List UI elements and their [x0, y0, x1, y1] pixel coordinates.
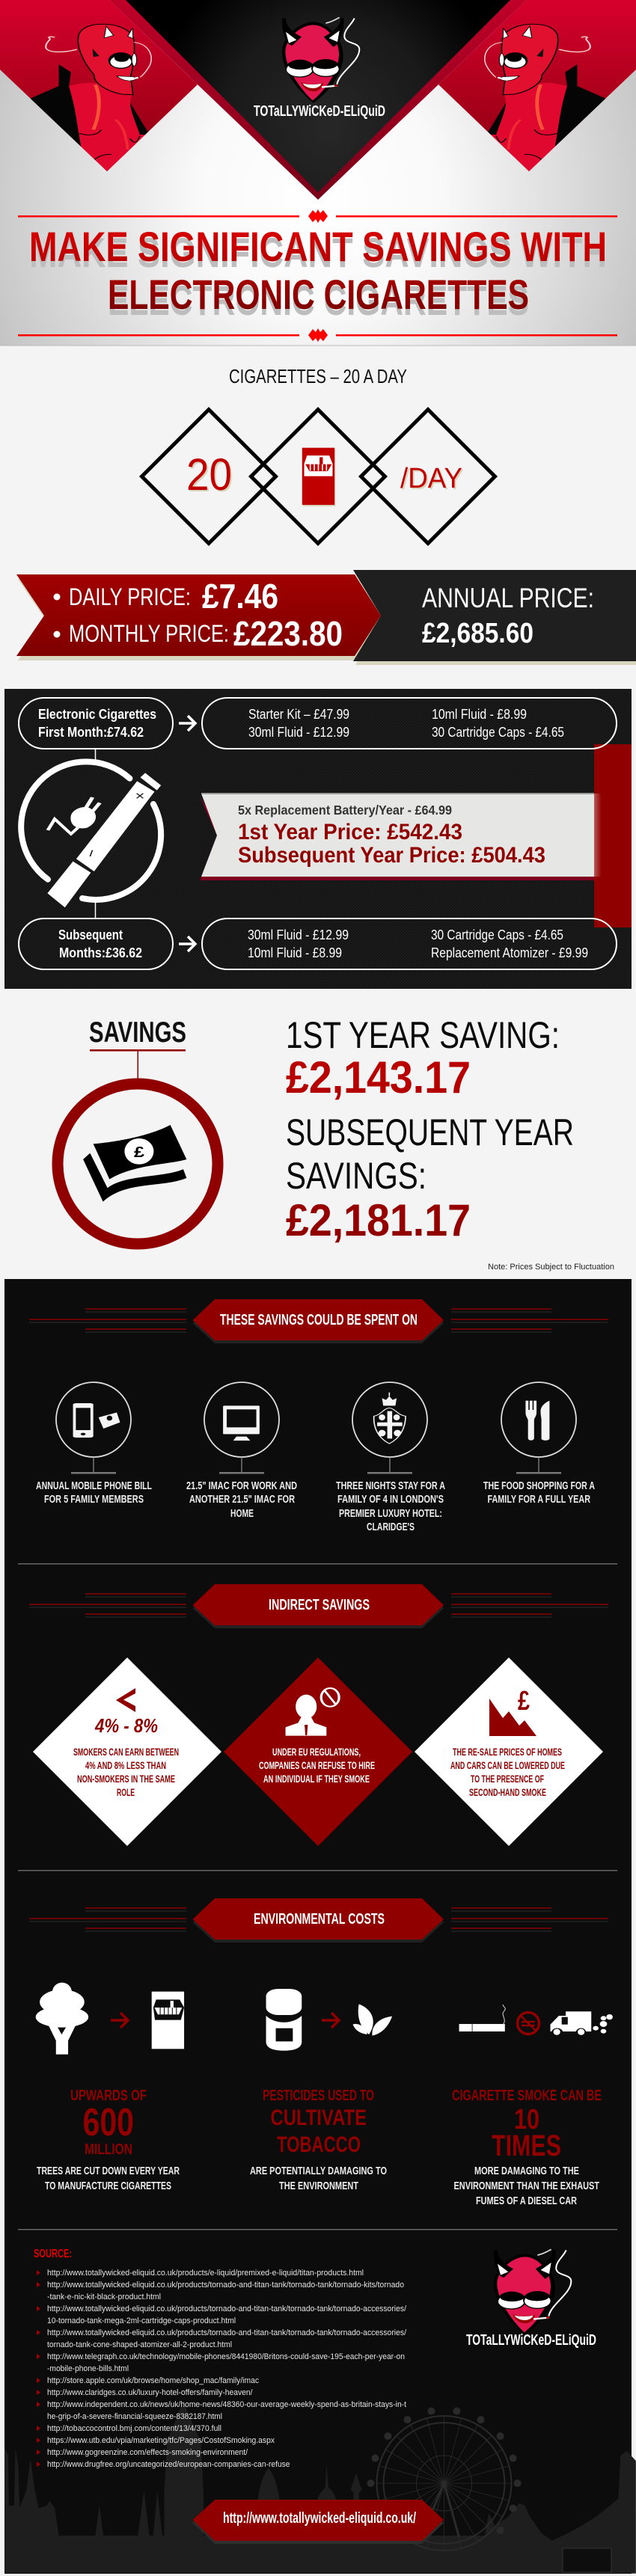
sources list: http://store.apple.com/uk/browse/home/shop_mac/family/imac	[47, 2376, 259, 2385]
Big Wheel	[367, 2407, 521, 2551]
diamond: EU regulations: UNDER EU REGULATIONS,	[272, 1747, 361, 1758]
icon: falling price chart: £	[518, 1685, 530, 1716]
column: pesticides: ARE POTENTIALLY DAMAGING TO	[250, 2165, 387, 2177]
icon: e-cigarette in ring	[21, 761, 161, 907]
ribbon: yearly prices: 5x Replacement Battery/Year - £64.99	[238, 803, 452, 818]
item: iMac	[186, 1382, 297, 1520]
title	[29, 223, 607, 318]
diamond: lower earnings: ROLE	[117, 1787, 135, 1798]
item: Claridge's hotel	[336, 1382, 445, 1533]
pill: first month: Electronic Cigarettes	[38, 707, 156, 722]
item: mobile phone bill: FOR 5 FAMILY MEMBERS	[44, 1494, 144, 1506]
price ribbon: daily and monthly: MONTHLY PRICE:	[69, 620, 229, 647]
column: pesticides: PESTICIDES USED TO	[263, 2088, 374, 2104]
logo: devil head	[282, 17, 359, 103]
pill: first month items: 30 Cartridge Caps - £4.65	[432, 725, 564, 740]
sources list: http://www.totallywicked-eliquid.co.uk/products/tornado-and-titan-tank/tornado-tank/tornado-kits/tornado	[47, 2281, 404, 2290]
ribbon: yearly prices	[200, 793, 594, 880]
icon: cigarette pack	[302, 448, 334, 505]
footer banner: website URL	[193, 2500, 444, 2544]
item: iMac: 21.5" IMAC FOR WORK AND	[186, 1480, 297, 1492]
header banner	[0, 0, 636, 346]
section banner: these savings could be spent on	[29, 1299, 608, 1343]
column: pesticides: THE ENVIRONMENT	[279, 2180, 358, 2192]
panel: electronic cigarette costs	[4, 689, 632, 989]
price ribbon: annual: £2,685.60	[422, 618, 533, 649]
diamond: EU regulations	[224, 1657, 412, 1846]
diamond: lower earnings: 4% - 8%	[94, 1714, 158, 1737]
bottom rule with ornament	[18, 328, 617, 342]
savings section: £2,181.17	[286, 1195, 471, 1245]
bridge base	[563, 2548, 611, 2572]
column: trees: TO MANUFACTURE CIGARETTES	[45, 2180, 171, 2192]
sources list: SOURCE:	[34, 2248, 72, 2260]
diamond: resale prices: THE RE-SALE PRICES OF HOMES	[453, 1747, 562, 1758]
savings section: SAVINGS:	[286, 1155, 426, 1197]
section banner: these savings could be spent on: THESE SAVINGS COULD BE SPENT ON	[220, 1312, 418, 1328]
diamond: lower earnings: 4% AND 8% LESS THAN	[85, 1760, 166, 1771]
column: trees: 600	[82, 2101, 134, 2144]
subtitle: cigarettes: CIGARETTES – 20 A DAY	[229, 365, 407, 387]
diamond: resale prices: SECOND-HAND SMOKE	[469, 1787, 546, 1798]
sources list: tornado-tank-cone-shaped-atomizer-all-2-product.html	[47, 2340, 232, 2349]
arrow	[179, 716, 195, 731]
section banner: indirect savings	[29, 1584, 608, 1628]
price ribbon: daily and monthly: £7.46	[202, 577, 278, 616]
panel: dark lower section	[4, 1279, 632, 2574]
pill: subsequent items: 30 Cartridge Caps - £4.65	[431, 927, 563, 942]
price ribbon: daily and monthly	[16, 574, 382, 660]
pill: first month: First Month:£74.62	[38, 725, 144, 740]
heading: savings: SAVINGS	[89, 1016, 186, 1049]
item: food shopping	[483, 1382, 595, 1506]
sources list: https://www.utb.edu/vpia/marketing/tfc/Pages/CostofSmoking.aspx	[47, 2436, 275, 2445]
pill: subsequent months: Months:£36.62	[59, 945, 142, 960]
savings section: £2,143.17	[286, 1052, 471, 1103]
pill: first month items	[202, 698, 617, 749]
item: Claridge's hotel: THREE NIGHTS STAY FOR A	[336, 1480, 445, 1492]
sources list: he-grip-of-a-severe-financial-squeeze-8382187.html	[47, 2412, 222, 2421]
diamond: lower earnings: SMOKERS CAN EARN BETWEEN	[73, 1747, 179, 1758]
icon: tree to cigarette pack	[36, 1983, 184, 2055]
red side block	[594, 744, 632, 927]
sources list: http://www.drugfree.org/uncategorized/european-companies-can-refuse	[47, 2460, 290, 2469]
sources list: http://tobaccocontrol.bmj.com/content/13/4/370.full	[47, 2424, 221, 2433]
pill: first month items: Starter Kit – £47.99	[248, 707, 349, 722]
diamonds: 20 packs per day	[142, 410, 495, 543]
note: Note: Prices Subject to Fluctuation	[488, 1263, 614, 1272]
item: mobile phone bill	[36, 1382, 152, 1506]
first year saving: 1ST YEAR SAVING:	[286, 1014, 560, 1056]
number 20: 20	[186, 450, 232, 500]
footer logo	[466, 2249, 596, 2349]
column: cigarette smoke: FUMES OF A DIESEL CAR	[476, 2195, 577, 2207]
column: pesticides: TOBACCO	[277, 2132, 361, 2157]
column: cigarette smoke: TIMES	[492, 2129, 561, 2162]
diamond: lower earnings: NON-SMOKERS IN THE SAME	[77, 1773, 175, 1785]
sources list: http://www.totallywicked-eliquid.co.uk/products/e-liquid/premixed-e-liquid/titan-products.html	[47, 2269, 364, 2278]
item: Claridge's hotel: FAMILY OF 4 IN LONDON'S	[337, 1494, 444, 1506]
section banner: environmental costs	[29, 1898, 608, 1942]
savings section	[58, 1014, 614, 1272]
icon: money in ring: £	[134, 1144, 144, 1161]
column: trees: UPWARDS OF	[70, 2088, 147, 2104]
sources list: http://www.totallywicked-eliquid.co.uk/products/tornado-and-titan-tank/tornado-tank/tornado-accessories/	[47, 2304, 407, 2313]
pill: subsequent items: 30ml Fluid - £12.99	[248, 927, 349, 942]
top rule with ornament	[18, 209, 617, 223]
icon: money in ring	[58, 1084, 218, 1244]
diamond: EU regulations: AN INDIVIDUAL IF THEY SMOKE	[263, 1773, 370, 1785]
column: cigarette smoke: 10	[514, 2104, 539, 2135]
icon: pesticide can to tobacco leaf	[266, 1989, 392, 2051]
section banner: indirect savings: INDIRECT SAVINGS	[269, 1597, 370, 1613]
sources list: -mobile-phone-bills.html	[47, 2364, 129, 2373]
London skyline background	[4, 2401, 636, 2574]
item: mobile phone bill: ANNUAL MOBILE PHONE BILL	[36, 1480, 152, 1492]
ribbon: yearly prices: Subsequent Year Price: £504.43	[238, 843, 545, 868]
logo wordmark: TOTaLLYWiCKeD-ELiQuiD	[254, 103, 385, 120]
connectors	[94, 749, 96, 919]
column: trees: TREES ARE CUT DOWN EVERY YEAR	[37, 2165, 180, 2177]
arrow	[179, 936, 195, 951]
item: iMac: HOME	[230, 1508, 254, 1520]
sources list: 10-tornado-tank-mega-2ml-cartridge-caps-product.html	[47, 2316, 236, 2325]
icon: person with prohibition sign	[286, 1688, 339, 1736]
price ribbon: daily and monthly: £223.80	[233, 614, 343, 653]
pill: first month items: 10ml Fluid - £8.99	[432, 707, 527, 722]
section banner: environmental costs: ENVIRONMENTAL COSTS	[254, 1911, 385, 1928]
column: pesticides: CULTIVATE	[271, 2106, 367, 2130]
label /DAY: /DAY	[400, 463, 462, 494]
diamond: lower earnings	[33, 1657, 221, 1846]
pill: subsequent months	[19, 919, 173, 969]
sources list	[34, 2248, 407, 2469]
pill: subsequent items: 10ml Fluid - £8.99	[248, 945, 342, 960]
diamond: EU regulations: COMPANIES CAN REFUSE TO HIRE	[259, 1760, 375, 1771]
item: food shopping: THE FOOD SHOPPING FOR A	[483, 1480, 595, 1492]
item: food shopping: FAMILY FOR A FULL YEAR	[488, 1494, 590, 1506]
sources list: -tank-e-nic-kit-black-product.html	[47, 2293, 161, 2301]
item: Claridge's hotel: PREMIER LUXURY HOTEL:	[339, 1508, 442, 1520]
pill: subsequent items: Replacement Atomizer - £9.99	[431, 945, 588, 960]
sources list: http://www.gogreenzine.com/effects-smoking-environment/	[47, 2448, 248, 2457]
item: iMac: ANOTHER 21.5" IMAC FOR	[189, 1494, 295, 1506]
ribbon: yearly prices: 1st Year Price: £542.43	[238, 820, 462, 844]
pill: subsequent items	[202, 919, 617, 969]
diamond: resale prices: AND CARS CAN BE LOWERED DUE	[450, 1760, 565, 1771]
right devil triangle	[438, 0, 636, 171]
left devil triangle	[0, 0, 198, 171]
sources list: http://www.claridges.co.uk/luxury-hotel-offers/family-heaven/	[47, 2388, 253, 2397]
pill: subsequent months: Subsequent	[58, 927, 123, 942]
price ribbon: annual	[353, 570, 636, 665]
pill: first month	[19, 698, 173, 749]
pill: first month items: 30ml Fluid - £12.99	[248, 725, 349, 740]
footer banner: website URL: http://www.totallywicked-eliquid.co.uk/	[223, 2510, 416, 2527]
sources list: http://www.independent.co.uk/news/uk/home-news/48360-our-average-weekly-spend-as-britain-stays-in-t	[47, 2400, 406, 2409]
sources list: http://www.totallywicked-eliquid.co.uk/products/tornado-and-titan-tank/tornado-tank/tornado-accessories/	[47, 2328, 407, 2337]
column: pesticides	[250, 1989, 392, 2192]
sources list: http://www.telegraph.co.uk/technology/mobile-phones/8441980/Britons-could-save-195-each-per-year-on	[47, 2352, 405, 2361]
column: trees	[36, 1983, 184, 2192]
price ribbon: daily and monthly: DAILY PRICE:	[69, 583, 191, 610]
diamond: resale prices: TO THE PRESENCE OF	[471, 1773, 544, 1785]
icon: cigarette versus diesel van	[459, 2005, 613, 2035]
item: Claridge's hotel: CLARIDGE'S	[367, 1521, 415, 1533]
icon: falling price chart	[489, 1685, 536, 1736]
price ribbon: annual: ANNUAL PRICE:	[422, 583, 594, 613]
column: trees: MILLION	[85, 2141, 132, 2158]
centre black chevron with logo	[109, 0, 527, 200]
column: cigarette smoke	[452, 2005, 613, 2207]
diamond: resale prices	[415, 1657, 603, 1846]
icon: less than	[116, 1688, 135, 1712]
column: cigarette smoke: MORE DAMAGING TO THE	[474, 2165, 579, 2177]
